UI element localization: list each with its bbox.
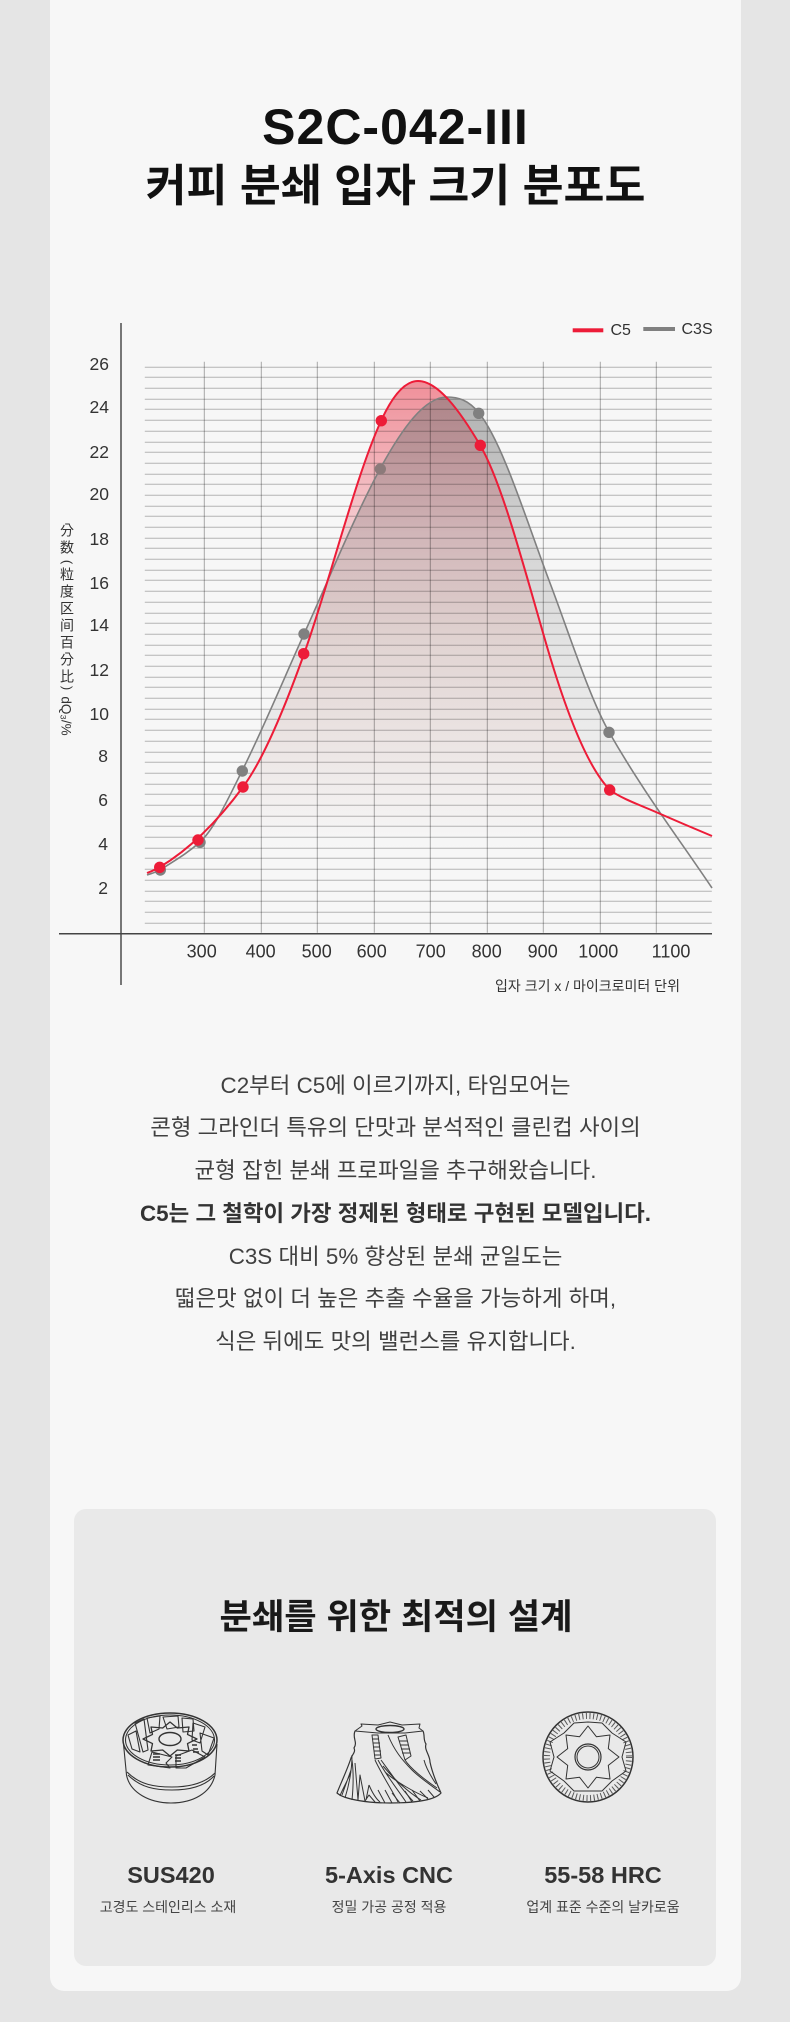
axes bbox=[59, 323, 712, 985]
y axis title: 数 bbox=[60, 538, 74, 558]
y axis title: 间 bbox=[60, 616, 74, 636]
x axis values: 400 bbox=[246, 942, 276, 962]
description paragraph: 식은 뒤에도 맛의 밸런스를 유지합니다. bbox=[215, 1329, 576, 1354]
y axis title: 分 bbox=[60, 520, 74, 540]
feature caption: 정밀 가공 공정 적용 bbox=[332, 1899, 446, 1915]
description paragraph: 떫은맛 없이 더 높은 추출 수율을 가능하게 하며, bbox=[175, 1286, 616, 1311]
title: S2C-042-III bbox=[262, 99, 529, 155]
y axis title bbox=[58, 520, 75, 736]
x axis values: 600 bbox=[357, 942, 387, 962]
feature: 5-Axis CNC bbox=[325, 1862, 453, 1915]
icon: conical burr bbox=[336, 1722, 442, 1804]
feature title: 55-58 HRC bbox=[544, 1862, 662, 1888]
y axis values: 26 bbox=[90, 354, 109, 374]
y axis title: ( bbox=[60, 560, 75, 565]
y axis title: 区 bbox=[60, 598, 74, 618]
legend bbox=[573, 321, 713, 339]
y axis title: 分 bbox=[60, 650, 74, 670]
particle size distribution chart bbox=[58, 321, 713, 994]
C3S area fill bbox=[147, 397, 712, 933]
description paragraph: C5는 그 철학이 가장 정제된 형태로 구현된 모델입니다. bbox=[140, 1201, 651, 1226]
description paragraph: 균형 잡힌 분쇄 프로파일을 추구해왔습니다. bbox=[195, 1158, 596, 1183]
y axis values: 10 bbox=[90, 704, 109, 724]
y axis values: 4 bbox=[98, 834, 108, 854]
x axis values: 900 bbox=[528, 942, 558, 962]
y axis title: 百 bbox=[60, 632, 74, 652]
x axis values: 1100 bbox=[652, 942, 690, 962]
y axis values: 14 bbox=[90, 615, 109, 635]
y axis title: 粒 bbox=[60, 564, 74, 584]
y axis values: 8 bbox=[98, 746, 108, 766]
description paragraph bbox=[140, 1072, 651, 1354]
y axis values: 24 bbox=[90, 397, 109, 417]
x axis values bbox=[187, 942, 690, 962]
y axis values: 6 bbox=[98, 790, 108, 810]
x axis values: 700 bbox=[416, 942, 446, 962]
description paragraph: C3S 대비 5% 향상된 분쇄 균일도는 bbox=[229, 1244, 562, 1269]
y axis values: 12 bbox=[90, 660, 109, 680]
y axis values: 2 bbox=[98, 878, 108, 898]
feature caption: 업계 표준 수준의 날카로움 bbox=[526, 1899, 680, 1915]
x axis values: 500 bbox=[302, 942, 332, 962]
C5 data points bbox=[154, 415, 615, 873]
legend: C5 bbox=[610, 322, 631, 339]
x axis title: 입자 크기 x / 마이크로미터 단위 bbox=[495, 978, 680, 994]
y axis title: 比 bbox=[60, 666, 74, 686]
y axis values bbox=[90, 354, 109, 898]
C5 curve bbox=[147, 381, 712, 873]
y axis values: 18 bbox=[90, 529, 109, 549]
icon: burr top view with rim bbox=[122, 1712, 218, 1804]
y axis title: ) bbox=[60, 686, 75, 690]
panel heading: 분쇄를 위한 최적의 설계 bbox=[219, 1598, 573, 1637]
y axis values: 20 bbox=[90, 484, 109, 504]
y axis title: 度 bbox=[60, 582, 74, 602]
feature: SUS420 bbox=[100, 1862, 236, 1915]
panel: grinding design bbox=[74, 1509, 716, 1966]
feature title: SUS420 bbox=[127, 1862, 215, 1888]
description paragraph: C2부터 C5에 이르기까지, 타임모어는 bbox=[221, 1072, 570, 1098]
y axis values: 16 bbox=[90, 573, 109, 593]
C3S data points bbox=[155, 408, 615, 876]
feature: 55-58 HRC bbox=[526, 1862, 680, 1915]
C3S curve bbox=[147, 397, 712, 888]
icon: burr bottom view bbox=[542, 1711, 634, 1803]
x axis values: 800 bbox=[472, 942, 502, 962]
description paragraph: 콘형 그라인더 특유의 단맛과 분석적인 클린컵 사이의 bbox=[150, 1115, 641, 1140]
title: 커피 분쇄 입자 크기 분포도 bbox=[146, 162, 645, 211]
feature title: 5-Axis CNC bbox=[325, 1862, 453, 1888]
y axis values: 22 bbox=[90, 442, 109, 462]
x axis values: 1000 bbox=[578, 942, 618, 962]
x axis values: 300 bbox=[187, 942, 217, 962]
feature caption: 고경도 스테인리스 소재 bbox=[100, 1899, 236, 1915]
y axis title: dQ₃/% bbox=[58, 696, 74, 736]
legend: C3S bbox=[682, 321, 713, 338]
title bbox=[146, 99, 645, 211]
C5 area fill bbox=[147, 381, 712, 933]
